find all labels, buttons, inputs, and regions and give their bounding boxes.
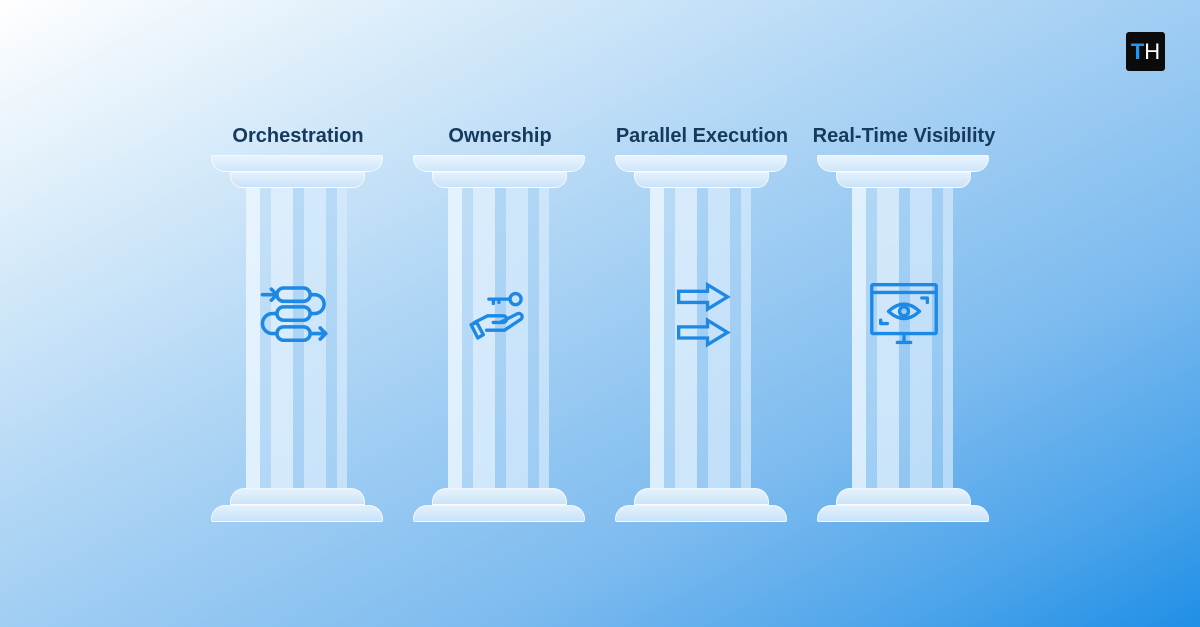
pillar: Ownership (413, 125, 585, 522)
pillar: Orchestration (211, 125, 383, 522)
heading: Ownership (448, 125, 552, 147)
icon: orchestration flow (260, 286, 328, 342)
pillar: Parallel Execution (615, 125, 788, 522)
heading: Real-Time Visibility (813, 125, 995, 147)
heading: Orchestration (232, 125, 364, 147)
icon: parallel arrows (677, 282, 731, 348)
heading: Parallel Execution (616, 125, 788, 147)
icon: hand with key (469, 292, 524, 340)
pillar: Real-Time Visibility (813, 125, 996, 522)
logo: TH (1131, 39, 1160, 64)
logo (1126, 32, 1165, 71)
icon: monitor with eye (870, 283, 938, 344)
